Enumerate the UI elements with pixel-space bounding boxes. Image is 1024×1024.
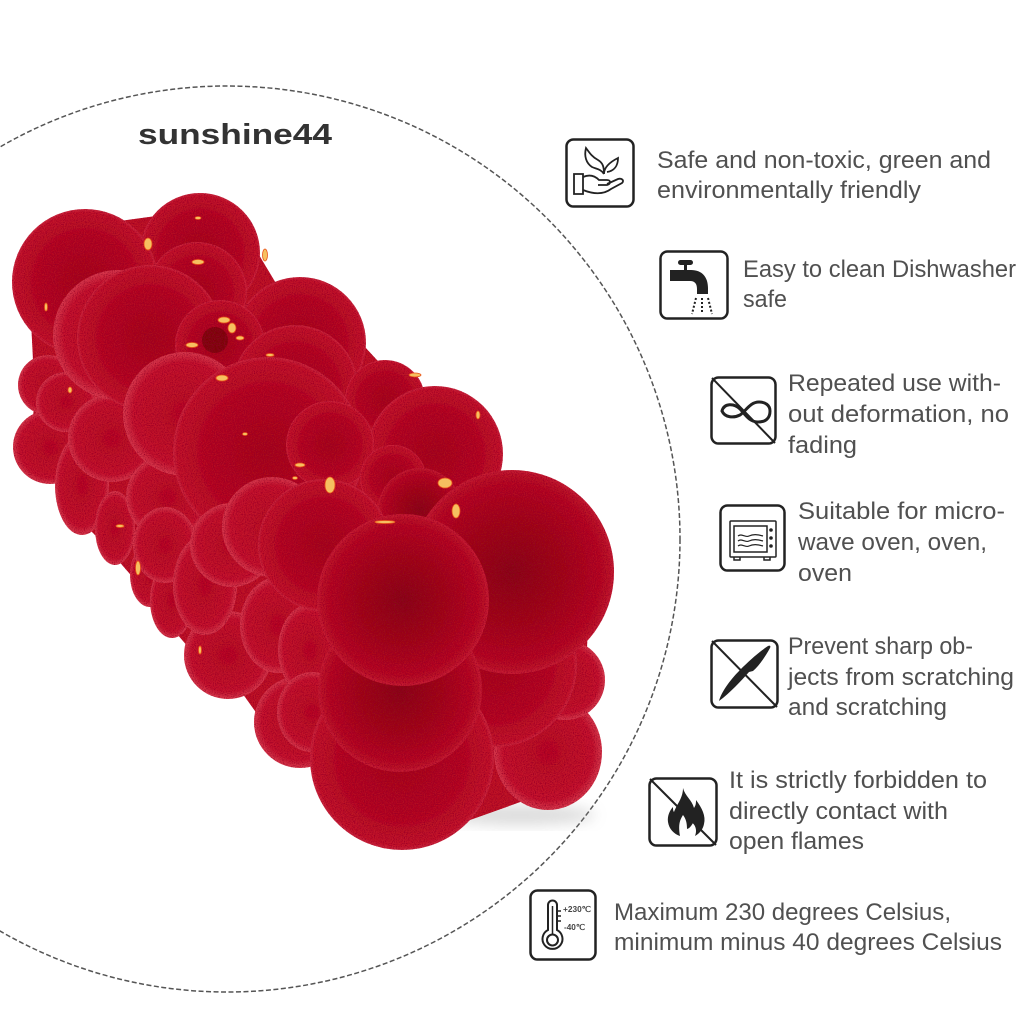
- text block: out deformation, no: [788, 401, 1009, 428]
- text block: [787, 633, 1014, 721]
- icon: thermometer: +230℃: [563, 905, 591, 914]
- feature 6: no open flames: [650, 767, 987, 855]
- icon: crossed infinity: [712, 378, 776, 444]
- feature 1: safe and non-toxic: [566, 140, 991, 206]
- text block: jects from scratching: [787, 664, 1014, 691]
- icon: thermometer: [530, 890, 596, 960]
- gold leaf flecks: [44, 216, 480, 654]
- text block: [657, 147, 991, 204]
- feature 5: no sharp objects: [712, 633, 1014, 721]
- text block: safe: [743, 286, 787, 313]
- icon: crossed knife: [712, 640, 778, 708]
- icon: faucet: [660, 252, 728, 318]
- text block: Safe and non-toxic, green and: [657, 147, 991, 174]
- text block: directly contact with: [729, 798, 948, 825]
- text block: [743, 256, 1016, 313]
- icon: microwave oven: [720, 506, 784, 570]
- watermark: sunshine44: [138, 119, 332, 151]
- icon: thermometer: -40℃: [564, 923, 585, 932]
- text block: Repeated use with-: [788, 370, 1001, 397]
- text block: oven: [798, 560, 852, 587]
- feature 4: microwave: [720, 498, 1005, 587]
- text block: Prevent sharp ob-: [788, 633, 973, 660]
- text block: Maximum 230 degrees Celsius,: [614, 899, 951, 926]
- feature 2: easy to clean: [660, 252, 1016, 318]
- icon: crossed flame: [650, 778, 716, 846]
- text block: minimum minus 40 degrees Celsius: [614, 929, 1002, 956]
- text block: open flames: [729, 828, 864, 855]
- text block: wave oven, oven,: [797, 529, 987, 556]
- text block: [614, 899, 1002, 956]
- dashed circle: [0, 86, 680, 992]
- text block: Suitable for micro-: [798, 498, 1005, 525]
- text block: fading: [788, 432, 857, 459]
- cake shadow: [445, 805, 595, 825]
- icon: hand with plant: [566, 140, 634, 206]
- text block: [797, 498, 1005, 587]
- text block: and scratching: [788, 694, 947, 721]
- cake spheres: [12, 193, 614, 850]
- feature 3: no deformation: [712, 370, 1009, 459]
- text block: It is strictly forbidden to: [729, 767, 987, 794]
- text block: [788, 370, 1009, 459]
- product: red bubble mousse cake: [12, 193, 614, 850]
- text block: environmentally friendly: [657, 177, 921, 204]
- feature 7: temperature range: [530, 890, 1002, 960]
- text block: Easy to clean Dishwasher: [743, 256, 1016, 283]
- text block: [729, 767, 987, 855]
